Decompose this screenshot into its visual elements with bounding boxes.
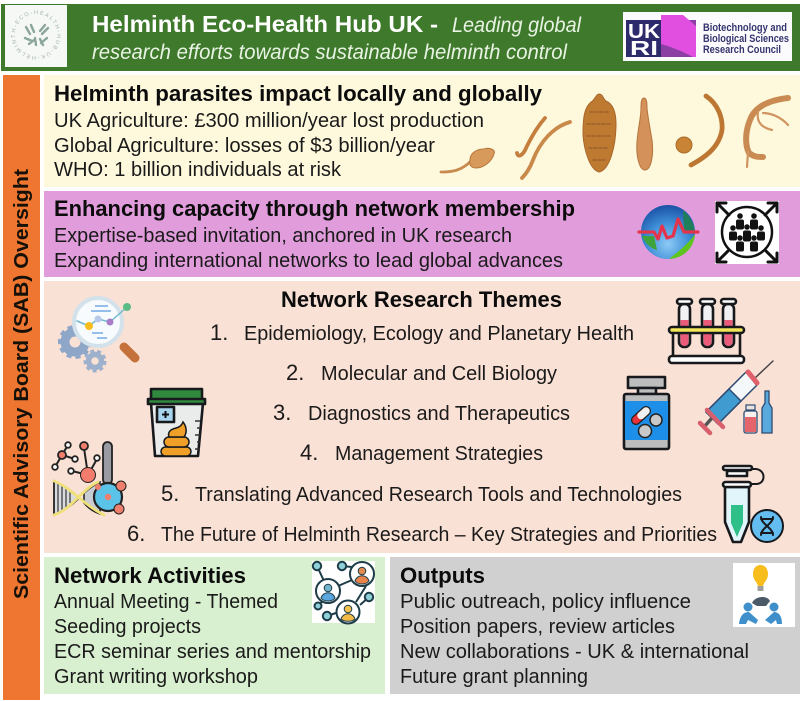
- panel: network research themes: [44, 281, 800, 553]
- panel: network activities: [44, 557, 385, 694]
- membership text: Expertise-based invitation, anchored in UK research: [54, 225, 512, 247]
- theme 4: Management Strategies: [335, 443, 543, 465]
- impact statistics: WHO: 1 billion individuals at risk: [54, 159, 342, 181]
- icon: expanding network of people: [715, 201, 779, 264]
- sidebar: Scientific Advisory Board oversight: Scientific Advisory Board (SAB) Oversight: [11, 169, 33, 599]
- outputs list: New collaborations - UK & international: [400, 641, 749, 663]
- hub logo: [5, 5, 67, 67]
- outputs list: [400, 591, 749, 688]
- heading: themes: Network Research Themes: [281, 287, 562, 312]
- banner title: research efforts towards sustainable helminth control: [92, 41, 568, 64]
- icon: people network: [312, 561, 375, 624]
- UKRI BBSRC logo: UK: [628, 21, 661, 43]
- theme 3: 3.: [273, 400, 291, 425]
- heading: outputs: Outputs: [400, 563, 485, 588]
- header banner: [1, 4, 800, 71]
- UKRI BBSRC logo: Research Council: [703, 44, 781, 56]
- icon: DNA and molecule: [52, 442, 126, 515]
- theme 1: Epidemiology, Ecology and Planetary Health: [244, 323, 634, 345]
- theme 6: 6.: [127, 521, 145, 546]
- activities list: Annual Meeting - Themed: [54, 591, 278, 613]
- hub logo: HELMINTH-ECO-HEALTH-HUB-UK-: [11, 10, 61, 60]
- heading: activities: Network Activities: [54, 563, 246, 588]
- panel: helminth impact: [44, 75, 800, 187]
- outputs list: Position papers, review articles: [400, 616, 675, 638]
- heading: capacity: Enhancing capacity through network membership: [54, 196, 575, 221]
- UKRI BBSRC logo: Biotechnology and: [703, 22, 787, 34]
- sidebar: Scientific Advisory Board oversight: [3, 75, 40, 700]
- banner title: Leading global: [452, 14, 582, 37]
- outputs list: Public outreach, policy influence: [400, 591, 691, 613]
- panel: outputs: [390, 557, 800, 694]
- heading: impact: Helminth parasites impact locally and globally: [54, 81, 543, 106]
- theme 2: Molecular and Cell Biology: [321, 363, 557, 385]
- theme 5: 5.: [161, 481, 179, 506]
- theme 6: The Future of Helminth Research – Key Strategies and Priorities: [161, 524, 717, 546]
- icon: stool sample cup: [148, 389, 205, 456]
- icon: globe with pulse: [639, 205, 698, 259]
- theme 4: 4.: [300, 440, 318, 465]
- UKRI BBSRC logo: [623, 12, 792, 61]
- activities list: [54, 591, 371, 688]
- theme 3: Diagnostics and Therapeutics: [308, 403, 570, 425]
- activities list: ECR seminar series and mentorship: [54, 641, 371, 663]
- theme 1: 1.: [210, 320, 228, 345]
- banner title: Helminth Eco-Health Hub UK -: [92, 11, 438, 37]
- icon: magnifier with gears: [60, 298, 135, 371]
- impact statistics: Global Agriculture: losses of $3 billion/year: [54, 135, 435, 157]
- UKRI BBSRC logo: RI: [630, 38, 658, 60]
- membership text: Expanding international networks to lead global advances: [54, 250, 563, 272]
- icon: syringe and vials: [700, 361, 773, 433]
- activities list: Seeding projects: [54, 616, 201, 638]
- icon: lightbulb and discussion: [733, 563, 795, 627]
- impact statistics: [54, 110, 484, 181]
- icon: sample tube with DNA: [723, 466, 783, 542]
- icon: test tubes in rack: [669, 299, 744, 363]
- banner title: [92, 11, 582, 64]
- impact statistics: UK Agriculture: £300 million/year lost production: [54, 110, 484, 132]
- membership text: [54, 225, 563, 272]
- icons: helminth parasites: [441, 94, 788, 178]
- panel: network membership: [44, 191, 800, 277]
- outputs list: Future grant planning: [400, 666, 588, 688]
- icon: pill bottle: [624, 377, 669, 449]
- theme 2: 2.: [286, 360, 304, 385]
- theme 5: Translating Advanced Research Tools and Technologies: [195, 484, 682, 506]
- activities list: Grant writing workshop: [54, 666, 258, 688]
